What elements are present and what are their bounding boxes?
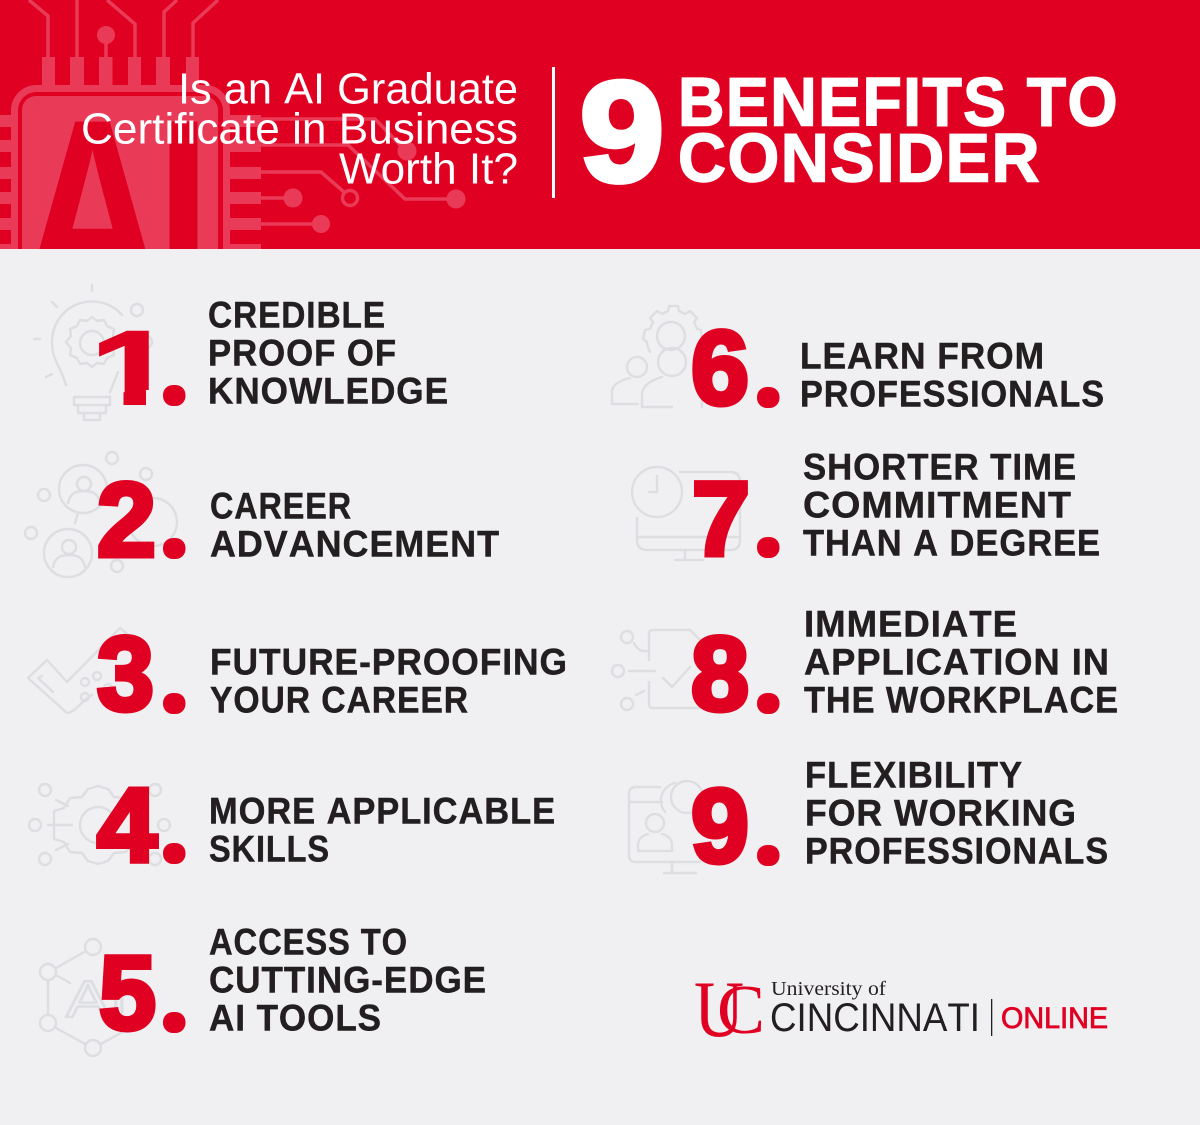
heading: question: Certificate in Business bbox=[81, 104, 518, 154]
label: CUTTING-EDGE bbox=[209, 958, 487, 1000]
benefit 5: access to cutting-edge AI tools bbox=[40, 920, 487, 1056]
icon: gear with nodes bbox=[29, 784, 170, 865]
icon: AI network: AI bbox=[66, 971, 128, 1029]
icon: AI circuit chip: A bbox=[19, 65, 166, 361]
logo: University of Cincinnati Online: ONLINE bbox=[1001, 1002, 1108, 1035]
number 1: 1 bbox=[90, 310, 176, 427]
heading: question: Worth It? bbox=[339, 144, 518, 194]
label: MORE APPLICABLE bbox=[209, 790, 556, 832]
label: PROFESSIONALS bbox=[800, 372, 1105, 414]
icon: check mark with nodes bbox=[28, 628, 132, 713]
label: CAREER bbox=[210, 484, 352, 526]
label: KNOWLEDGE bbox=[208, 370, 449, 412]
label bbox=[800, 334, 1105, 414]
number 4: 4 bbox=[97, 767, 157, 884]
number 8: 8 bbox=[691, 616, 749, 733]
label: AI TOOLS bbox=[209, 996, 382, 1038]
label: APPLICATION IN bbox=[804, 640, 1110, 682]
benefit 8: immediate application in the workplace bbox=[612, 602, 1119, 733]
label bbox=[210, 640, 568, 720]
icon: AI network bbox=[40, 939, 135, 1056]
benefit 1: credible proof of knowledge bbox=[34, 285, 449, 427]
benefit 7: shorter time commitment than a degree bbox=[632, 446, 1101, 578]
number 7: 7 bbox=[692, 461, 750, 578]
label: COMMITMENT bbox=[803, 484, 1072, 526]
icon: video call monitor bbox=[629, 781, 703, 873]
number 5: 5 bbox=[99, 935, 156, 1052]
label: LEARN FROM bbox=[800, 334, 1045, 376]
label bbox=[210, 484, 500, 564]
label: PROOF OF bbox=[208, 332, 397, 374]
label: SKILLS bbox=[209, 828, 330, 870]
label: FOR WORKING bbox=[805, 792, 1077, 834]
label bbox=[208, 294, 449, 412]
benefit 4: more applicable skills bbox=[29, 767, 556, 884]
label: SHORTER TIME bbox=[803, 446, 1077, 488]
header banner bbox=[0, 0, 1200, 249]
icon: UC monogram: U bbox=[694, 966, 744, 1054]
benefit 2: career advancement bbox=[25, 452, 500, 579]
logo: University of Cincinnati Online: University of bbox=[771, 978, 886, 1000]
label bbox=[803, 446, 1101, 564]
number 2: 2 bbox=[97, 462, 156, 579]
heading: question bbox=[81, 64, 518, 194]
label: ACCESS TO bbox=[209, 920, 408, 962]
benefit 6: learn from professionals bbox=[612, 306, 1105, 427]
icon: AI circuit chip: I bbox=[156, 65, 210, 361]
label bbox=[209, 790, 556, 870]
number 6: 6 bbox=[691, 310, 749, 427]
heading: 9 benefits to consider bbox=[580, 53, 1119, 212]
number 9: 9 bbox=[691, 768, 749, 885]
icon: professionals with gear bbox=[612, 306, 702, 407]
label: IMMEDIATE bbox=[804, 602, 1018, 644]
label: FLEXIBILITY bbox=[805, 754, 1023, 796]
heading: 9 benefits to consider: 9 bbox=[580, 53, 664, 212]
icon: connected people bbox=[25, 452, 177, 577]
label: THAN A DEGREE bbox=[803, 522, 1101, 564]
icon: document with check bbox=[612, 630, 700, 710]
label bbox=[209, 920, 487, 1038]
heading: question: Is an AI Graduate bbox=[178, 64, 518, 114]
label: THE WORKPLACE bbox=[804, 678, 1119, 720]
logo: University of Cincinnati Online: CINCINNATI bbox=[770, 996, 980, 1040]
label: FUTURE-PROOFING bbox=[210, 640, 568, 682]
label: CREDIBLE bbox=[208, 294, 386, 336]
label bbox=[805, 754, 1109, 872]
logo: University of Cincinnati Online bbox=[694, 966, 1108, 1054]
benefit 3: future-proofing your career bbox=[28, 616, 568, 733]
label: YOUR CAREER bbox=[210, 678, 469, 720]
icon: UC monogram: C bbox=[717, 972, 765, 1049]
label bbox=[804, 602, 1119, 720]
benefit 9: flexibility for working professionals bbox=[629, 754, 1109, 885]
icon: clock and monitor bbox=[632, 467, 740, 560]
icon: AI circuit chip bbox=[0, 0, 466, 249]
label: PROFESSIONALS bbox=[805, 830, 1109, 872]
heading: 9 benefits to consider: CONSIDER bbox=[678, 120, 1041, 196]
heading: 9 benefits to consider: BENEFITS TO bbox=[678, 64, 1119, 140]
number 3: 3 bbox=[97, 616, 154, 733]
icon: light bulb with gear bbox=[34, 285, 152, 420]
label: ADVANCEMENT bbox=[210, 522, 500, 564]
